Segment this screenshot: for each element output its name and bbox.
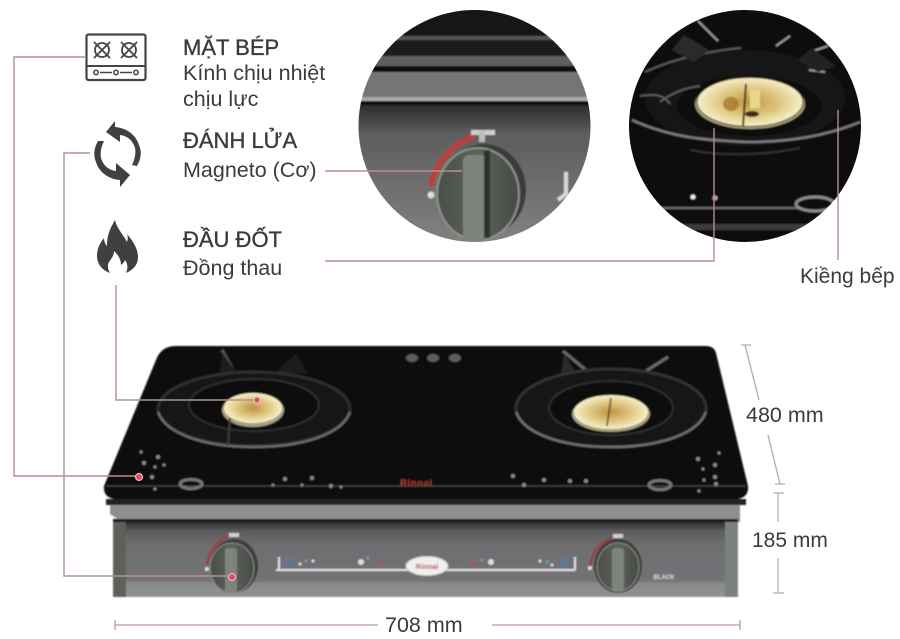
detail circle: knob [358, 10, 590, 242]
text: kính chịu nhiệt: Kính chịu nhiệt [183, 61, 325, 85]
icon: cooktop [86, 34, 146, 80]
right burner [516, 351, 706, 447]
brand on glass: Rinnai [400, 478, 433, 489]
callout markers [136, 397, 260, 580]
text: magneto: Magneto (Cơ) [183, 158, 317, 182]
side band [110, 500, 740, 522]
callout lines [14, 57, 838, 576]
text: chịu lực: chịu lực [183, 87, 259, 111]
label: kiềng bếp: Kiềng bếp [800, 265, 895, 288]
heading: mặt bếp: MẶT BÉP [183, 35, 279, 60]
icon: flame [97, 220, 138, 273]
stove [104, 346, 748, 597]
glass top [104, 346, 748, 499]
left burner [158, 350, 350, 447]
heading: đánh lửa: ĐÁNH LỬA [183, 128, 297, 153]
right knob [588, 534, 642, 593]
model tag: BLACK [654, 575, 675, 581]
dimension: depth [741, 345, 824, 484]
control strip [276, 556, 575, 570]
stove body [113, 522, 738, 597]
glass dots [140, 450, 720, 492]
heading: đầu đốt: ĐẦU ĐỐT [183, 226, 282, 252]
brand on badge: Rinnai [416, 562, 438, 571]
left knob [205, 533, 258, 593]
brand badge [406, 556, 448, 576]
text: đồng thau: Đồng thau [183, 256, 282, 280]
vent rings [180, 480, 202, 488]
height value: 185 mm [752, 529, 828, 552]
dimension: width [115, 613, 740, 637]
control icons [406, 354, 461, 362]
width value: 708 mm [385, 613, 463, 637]
dimension: height [752, 493, 828, 593]
depth value: 480 mm [746, 403, 824, 427]
detail circle: burner [625, 0, 865, 245]
icon: rotating arrows [94, 121, 141, 187]
